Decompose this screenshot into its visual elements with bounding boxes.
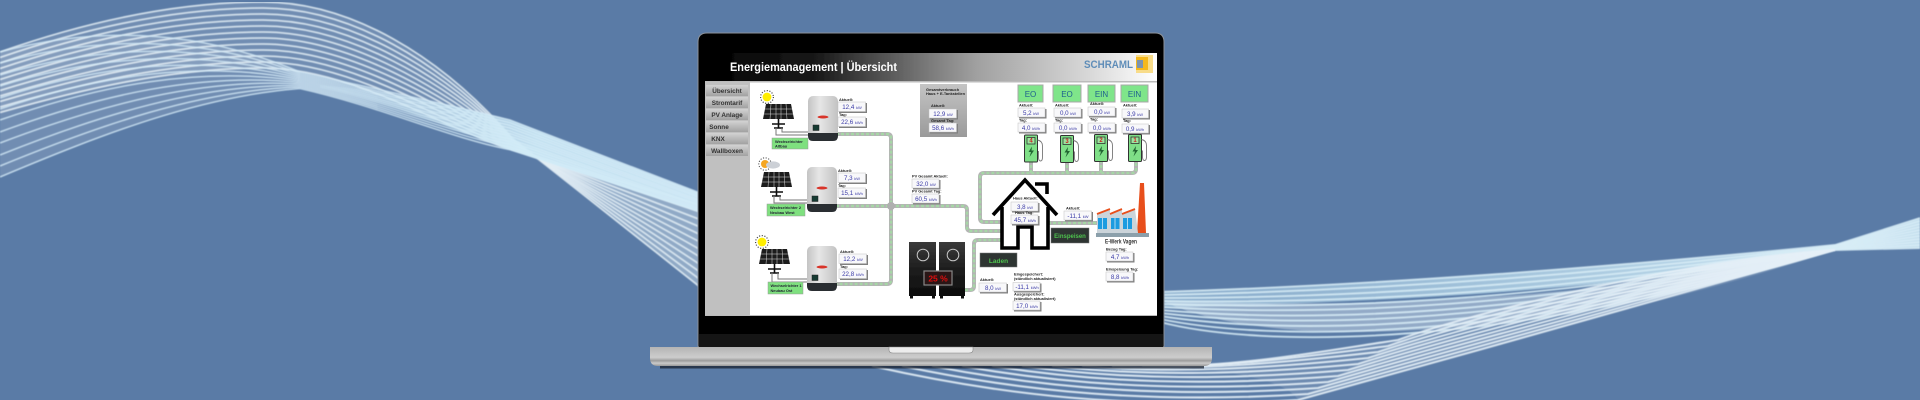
panel: total consumption: 12,9 kW xyxy=(933,111,953,118)
grid readings xyxy=(1106,246,1138,282)
readings: 22,8 kWh xyxy=(842,271,864,278)
inverter label xyxy=(768,282,803,294)
inverter label: Wechselrichter xyxy=(775,139,803,144)
battery readings: 17,0 kWh xyxy=(1016,303,1038,310)
wallbox 4: EO xyxy=(1025,90,1036,99)
wallbox 4: 5,2 kW xyxy=(1023,110,1039,117)
battery charge level: 25 % xyxy=(928,274,948,284)
brand logo xyxy=(1084,55,1153,73)
wallbox 4: Tag: xyxy=(1019,118,1027,122)
sidebar navigation: Wallboxen xyxy=(711,148,743,155)
wave ribbon: left crossing band xyxy=(0,35,700,212)
readings: Tag: xyxy=(839,112,847,117)
status: Laden xyxy=(980,253,1017,267)
icon: house xyxy=(993,180,1057,248)
house readings: Haus Aktuell: xyxy=(1013,196,1038,200)
grid readings: 8,8 kWh xyxy=(1111,274,1129,281)
power plant label: E-Werk Vagen xyxy=(1105,240,1137,246)
grid readings: Einspeisung Tag: xyxy=(1106,266,1138,272)
wallbox 1: 1 xyxy=(1133,138,1137,144)
wallbox 2: Tag: xyxy=(1090,116,1098,122)
inverter label xyxy=(767,204,805,216)
inverter label xyxy=(772,138,808,149)
icon: inverter xyxy=(807,246,837,291)
header bar xyxy=(705,53,1157,81)
PV total readings: PV Gesamt Tag: xyxy=(912,188,942,194)
readings xyxy=(839,249,868,280)
battery readings: Aktuell: xyxy=(980,277,994,282)
wallbox 1: Aktuell: xyxy=(1123,102,1137,108)
battery readings: Ausgespeichert: xyxy=(1014,292,1044,296)
PV total readings: PV Gesamt Aktuell: xyxy=(912,174,948,178)
panel: total consumption: Gesamtverbrauch xyxy=(926,87,960,92)
wallbox 3: 0,0 kWh xyxy=(1059,125,1077,132)
readings: Aktuell: xyxy=(840,249,854,254)
wallbox 2: Aktuell: xyxy=(1090,101,1104,106)
battery readings xyxy=(979,272,1056,312)
wallbox 4 xyxy=(1018,85,1046,162)
sidebar navigation: Sonne xyxy=(709,124,729,131)
readings: 22,6 kWh xyxy=(841,119,863,126)
grid readings: Bezug Tag: xyxy=(1106,246,1127,252)
icon: battery storage xyxy=(909,242,965,298)
panel: total consumption: Aktuell: xyxy=(931,103,945,108)
icon: sun behind cloud xyxy=(759,158,780,170)
wallbox 3: Aktuell: xyxy=(1055,102,1069,108)
readings: Aktuell: xyxy=(838,168,852,173)
icon: sun xyxy=(756,236,768,248)
readings: Aktuell: xyxy=(839,97,853,102)
readings: 7,3 kW xyxy=(844,175,860,182)
icon: inverter xyxy=(807,167,837,212)
inverter label: Neubau West xyxy=(770,210,795,215)
screen xyxy=(705,53,1157,316)
inverter group: Altbau xyxy=(761,91,867,149)
panel: total consumption: Haus + E-Tankstellen xyxy=(926,91,966,96)
icon: power plant xyxy=(1096,183,1149,237)
battery readings: 8,0 kW xyxy=(985,285,1001,292)
wave ribbon: upper left arch xyxy=(0,2,700,287)
panel: total consumption: Gesamt Tag: xyxy=(931,118,954,123)
battery readings: -11,1 kWh xyxy=(1015,284,1039,291)
laptop lid xyxy=(698,33,1164,347)
wallbox 4: Aktuell: xyxy=(1019,102,1033,108)
panel: total consumption: 58,6 kWh xyxy=(932,125,954,132)
laptop bottom bezel strip xyxy=(699,334,1163,347)
battery readings: (stündlich aktualisiert) xyxy=(1014,276,1056,281)
PV total readings xyxy=(912,174,948,204)
wallbox 2: 0,0 kW xyxy=(1094,109,1110,116)
brand logo: SCHRAML xyxy=(1084,59,1133,71)
readings: 15,1 kWh xyxy=(841,190,863,197)
readings: 12,4 kW xyxy=(842,104,862,111)
battery readings: Eingespeichert: xyxy=(1014,272,1043,276)
inverter label: Neubau Ost xyxy=(770,288,793,293)
title: Energiemanagement | Übersicht xyxy=(730,59,897,74)
grid readings: 4,7 kWh xyxy=(1111,254,1129,261)
wallbox 1: 0,9 kWh xyxy=(1126,126,1144,133)
icon: solar panel xyxy=(761,172,792,196)
screen background xyxy=(705,53,1157,316)
readings: Tag: xyxy=(840,264,848,269)
grid flow reading: -11,1 kW xyxy=(1067,213,1089,220)
laptop xyxy=(650,33,1212,368)
icon: solar panel xyxy=(759,249,790,273)
wallbox 1: 3,9 kW xyxy=(1127,111,1143,118)
wallbox 3: EO xyxy=(1061,90,1073,99)
wallbox 2: 2 xyxy=(1099,138,1103,144)
wallbox 3: 0,0 kW xyxy=(1060,110,1076,117)
sidebar navigation xyxy=(705,82,750,316)
status: Einspeisen: Einspeisen xyxy=(1054,234,1086,240)
sidebar navigation: KNX xyxy=(711,136,725,143)
readings: 12,2 kW xyxy=(843,256,863,263)
icon: inverter xyxy=(808,96,838,141)
laptop base xyxy=(650,347,1212,366)
wave ribbon: right band xyxy=(1160,218,1920,337)
wallbox 2 xyxy=(1088,85,1116,162)
wallbox 4: 4,0 kWh xyxy=(1022,125,1040,132)
laptop shadow xyxy=(660,366,1204,368)
house readings: 3,8 kW xyxy=(1017,204,1033,211)
laptop notch xyxy=(889,347,973,353)
grid flow reading xyxy=(1064,206,1093,222)
wallbox 4: 4 xyxy=(1029,138,1033,144)
wallbox 2: EIN xyxy=(1095,90,1108,99)
wallbox 3: 3 xyxy=(1065,139,1069,145)
inverter group: Neubau West xyxy=(759,158,867,216)
inverter label: Altbau xyxy=(775,144,788,148)
house readings: 45,7 kWh xyxy=(1014,217,1036,224)
icon: sun xyxy=(761,91,773,103)
wave ribbon: lower right arcs xyxy=(872,250,1835,400)
sidebar navigation: Übersicht xyxy=(712,86,743,95)
sidebar navigation: Stromtarif xyxy=(712,100,743,107)
wallbox 3 xyxy=(1053,85,1082,162)
wallbox 1: Tag: xyxy=(1123,118,1131,123)
energy flow pipes xyxy=(836,134,1136,290)
wallbox 2: 0,0 kWh xyxy=(1093,125,1111,132)
house readings xyxy=(1011,196,1040,226)
icon: solar panel xyxy=(763,104,794,128)
grid flow reading: Aktuell: xyxy=(1066,206,1080,210)
inverter label: Wechselrichter 2 xyxy=(770,205,802,210)
sidebar navigation: PV Anlage xyxy=(711,112,743,119)
readings xyxy=(838,168,867,199)
status: Einspeisen xyxy=(1051,228,1089,243)
readings xyxy=(838,97,867,128)
wallbox 1: EIN xyxy=(1128,90,1141,99)
PV total readings: 60,5 kWh xyxy=(915,196,937,203)
inverter group: Neubau Ost xyxy=(756,236,868,294)
inverter label: Wechselrichter 1 xyxy=(770,283,802,288)
house readings: Haus Tag: xyxy=(1015,210,1034,215)
battery readings: (stündlich aktualisiert) xyxy=(1014,296,1056,301)
PV total readings: 32,0 kW xyxy=(916,181,936,188)
readings: Tag: xyxy=(838,183,846,188)
wallbox 3: Tag: xyxy=(1055,118,1063,122)
status: Laden: Laden xyxy=(989,258,1008,265)
wallbox 1 xyxy=(1121,85,1150,162)
panel: total consumption xyxy=(920,84,967,137)
